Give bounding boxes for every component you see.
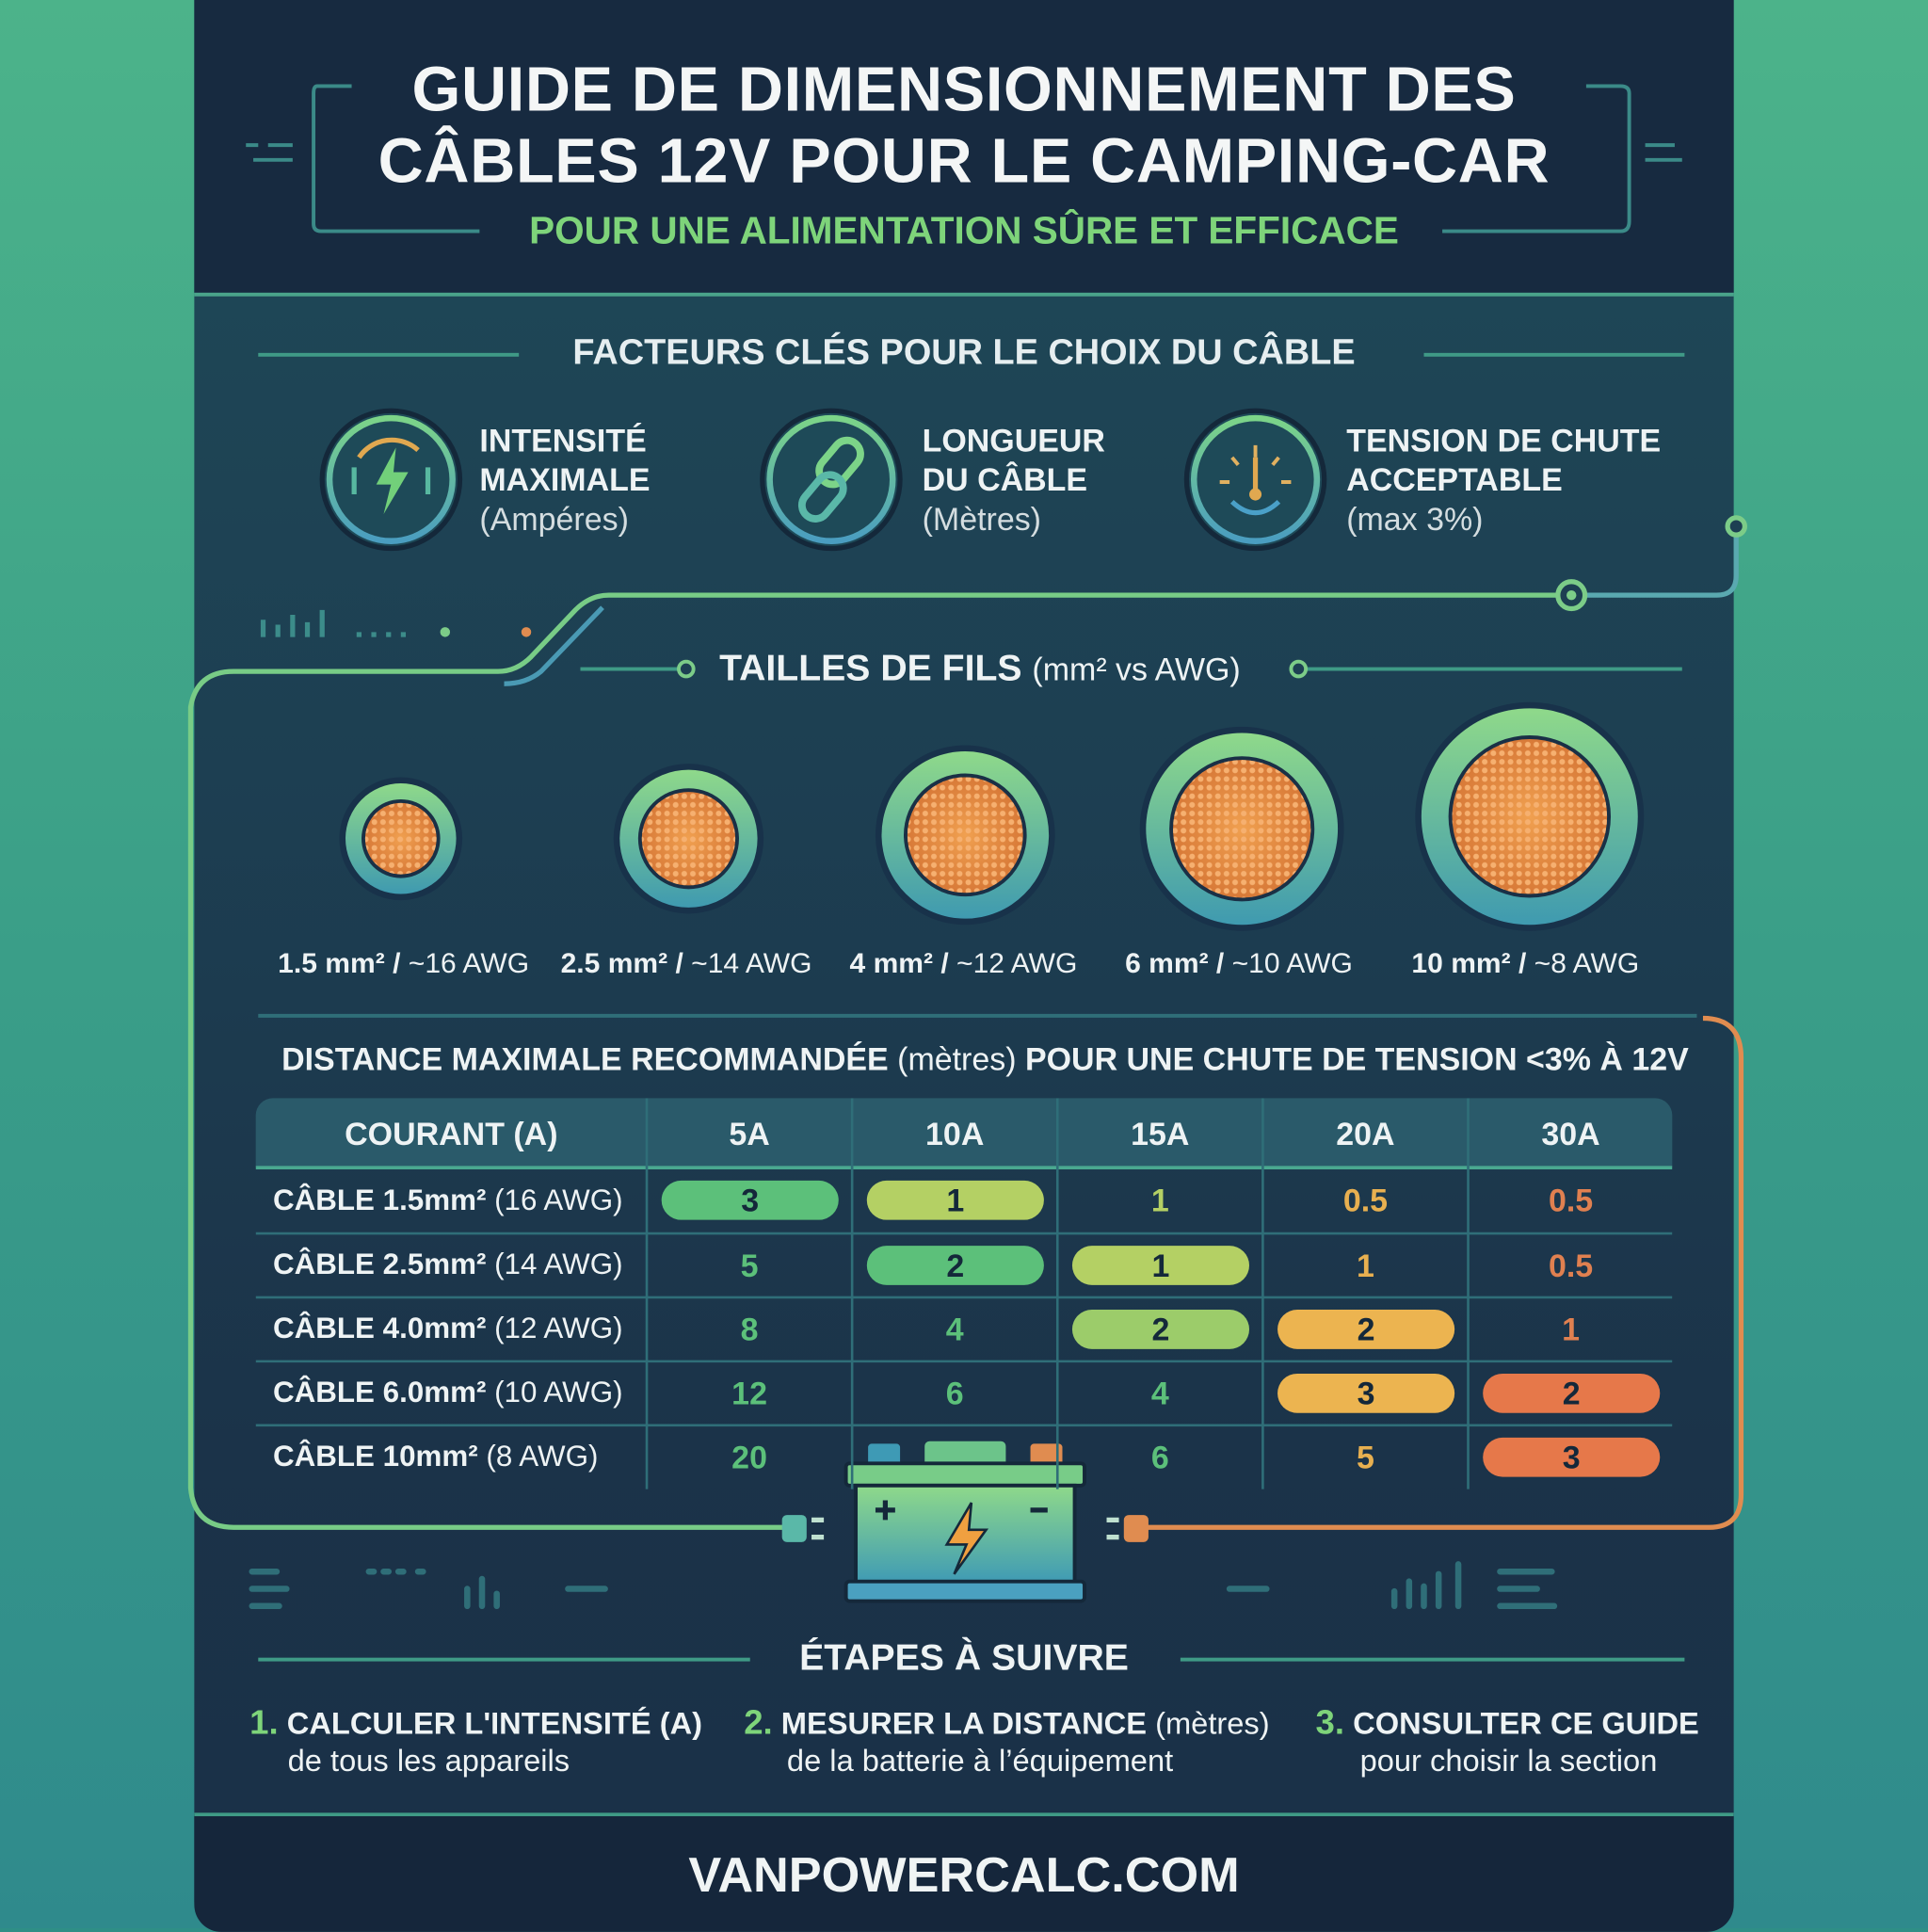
row cells	[661, 1181, 1661, 1477]
wire size circles	[339, 777, 462, 900]
row cells: 0.5	[1343, 1182, 1388, 1218]
steps: de tous les appareils	[288, 1744, 570, 1779]
text: DU CÂBLE	[923, 461, 1087, 498]
factor texts: MAXIMALE	[479, 461, 651, 498]
row cells: 20	[731, 1439, 767, 1475]
row cells: 8	[741, 1311, 759, 1348]
row cells: 12	[731, 1375, 767, 1411]
row cells: 1	[1357, 1247, 1374, 1284]
footer	[194, 1812, 1734, 1932]
table: 15A	[1131, 1116, 1189, 1152]
text: ACCEPTABLE	[1346, 461, 1563, 498]
table: 30A	[1541, 1116, 1600, 1152]
row cells: 2	[1563, 1375, 1581, 1411]
row cells: 2	[1152, 1311, 1169, 1348]
title: GUIDE DE DIMENSIONNEMENT DES	[411, 54, 1517, 124]
steps: 1. CALCULER L'INTENSITÉ (A)	[249, 1703, 702, 1741]
table: CÂBLE 2.5mm² (14 AWG)	[273, 1248, 623, 1281]
tailles line decor	[580, 668, 1682, 670]
table: CÂBLE 1.5mm² (16 AWG)	[273, 1184, 623, 1217]
row cells: 1	[946, 1182, 964, 1218]
decorative bottom bars	[252, 1564, 1554, 1606]
subtitle: POUR UNE ALIMENTATION SÛRE ET EFFICACE	[529, 209, 1399, 252]
row cells: 2	[946, 1247, 964, 1284]
battery	[782, 1441, 1149, 1602]
row cells: 1	[1562, 1311, 1580, 1348]
row cells: 5	[1357, 1439, 1374, 1475]
wire labels: 6 mm² / ~10 AWG	[1125, 947, 1353, 979]
wire labels: 2.5 mm² / ~14 AWG	[561, 947, 811, 979]
header band	[194, 0, 1734, 293]
footer: VANPOWERCALC.COM	[688, 1848, 1240, 1903]
wires	[190, 529, 1741, 1527]
row cells: 3	[1358, 1375, 1375, 1411]
steps	[249, 1703, 1699, 1779]
wire labels: 1.5 mm² / ~16 AWG	[278, 947, 529, 979]
divider	[194, 293, 1734, 297]
title	[378, 54, 1550, 196]
wire labels: 10 mm² / ~8 AWG	[1411, 947, 1639, 979]
row cells: 5	[741, 1247, 759, 1284]
wire labels	[278, 947, 1639, 979]
factor texts	[479, 422, 651, 538]
section heading: facteurs: FACTEURS CLÉS POUR LE CHOIX DU CÂBLE	[572, 333, 1356, 373]
row cells: 2	[1358, 1311, 1375, 1348]
factor texts: (Ampéres)	[479, 501, 629, 538]
row cells: 6	[1151, 1439, 1169, 1475]
steps: de la batterie à l’équipement	[787, 1744, 1173, 1779]
icon: intensity gauge	[322, 411, 459, 549]
main panel	[194, 0, 1734, 1928]
row cells: 1	[1152, 1247, 1169, 1284]
table: CÂBLE 10mm² (8 AWG)	[273, 1440, 598, 1473]
icon: chain	[763, 411, 900, 549]
text: TENSION DE CHUTE	[1346, 422, 1661, 459]
factor texts: INTENSITÉ	[479, 422, 647, 459]
table heading: DISTANCE MAXIMALE RECOMMANDÉE (mètres) POUR UNE CHUTE DE TENSION <3% À 12V	[281, 1040, 1689, 1077]
steps: 2. MESURER LA DISTANCE (mètres)	[744, 1703, 1270, 1741]
steps: pour choisir la section	[1360, 1744, 1657, 1779]
steps: 3. CONSULTER CE GUIDE	[1316, 1703, 1699, 1741]
text: (max 3%)	[1346, 501, 1484, 538]
heading: etapes: ÉTAPES À SUIVRE	[799, 1638, 1129, 1679]
row cells: 3	[741, 1182, 759, 1218]
row cells: 3	[1563, 1439, 1581, 1475]
table: 20A	[1336, 1116, 1395, 1152]
table: CÂBLE 6.0mm² (10 AWG)	[273, 1377, 623, 1409]
table: COURANT (A)	[345, 1116, 558, 1152]
wire labels: 4 mm² / ~12 AWG	[850, 947, 1077, 979]
row cells: 1	[1151, 1182, 1169, 1218]
row cells: 0.5	[1549, 1247, 1593, 1284]
heading: tailles de fils: TAILLES DE FILS (mm² vs AWG)	[719, 648, 1241, 688]
row cells: 4	[1151, 1375, 1169, 1411]
row cells: 6	[946, 1375, 964, 1411]
table	[256, 1098, 1672, 1489]
table: 10A	[925, 1116, 984, 1152]
row cells: 4	[946, 1311, 964, 1348]
table: CÂBLE 4.0mm² (12 AWG)	[273, 1312, 623, 1345]
table: 5A	[729, 1116, 770, 1152]
icon: voltage drop gauge	[1186, 411, 1325, 549]
title: CÂBLES 12V POUR LE CAMPING-CAR	[378, 125, 1550, 196]
row cells: 0.5	[1549, 1182, 1593, 1218]
text: LONGUEUR	[923, 422, 1105, 459]
text: (Mètres)	[923, 501, 1041, 538]
